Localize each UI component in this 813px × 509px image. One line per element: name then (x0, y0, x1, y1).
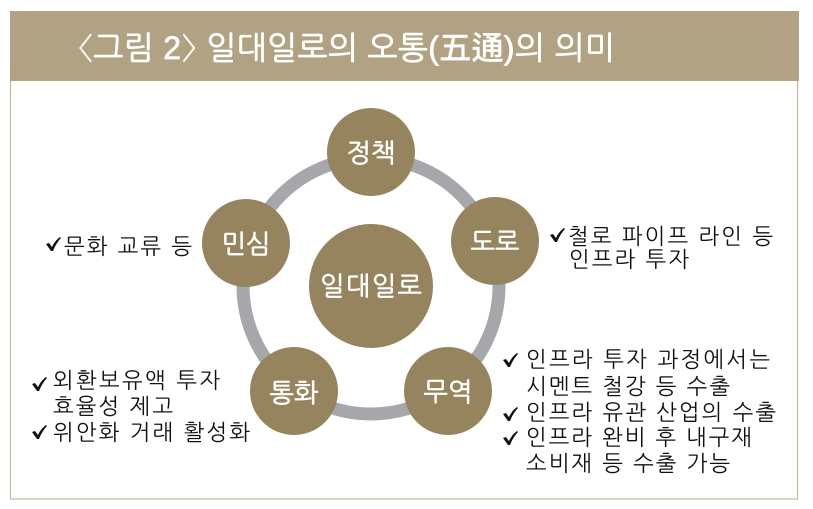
node: 통화: 통화 (270, 378, 318, 408)
text block: 무역: 인프라 유관 산업의 수출 (526, 400, 776, 425)
text block: 무역: 시멘트 철강 등 수출 (526, 374, 730, 399)
node: 정책 (327, 108, 415, 196)
center: 일대일로 (309, 224, 433, 348)
text block: 통화 (32, 368, 250, 445)
node: 민심: 민심 (222, 229, 270, 259)
text block: 민심: 문화 교류 등 (64, 234, 192, 259)
text block: 무역: 소비재 등 수출 가능 (526, 451, 730, 476)
center: 일대일로: 일대일로 (320, 271, 422, 301)
text block: 도로 (550, 224, 773, 272)
ring (243, 158, 499, 414)
node: 정책: 정책 (347, 138, 395, 168)
title: 〈그림 2〉 일대일로의 오통(五通)의 의미 (78, 30, 615, 66)
node: 무역 (404, 347, 492, 435)
text block: 무역: 인프라 투자 과정에서는 (526, 347, 770, 372)
text block: 통화: 외환보유액 투자 (53, 368, 220, 393)
diagram: ring of five connectivities (202, 108, 539, 435)
node: 도로 (451, 197, 539, 285)
node: 통화 (250, 347, 338, 435)
text block: 도로: 인프라 투자 (569, 247, 689, 272)
text block: 무역: 인프라 완비 후 내구재 (526, 425, 752, 450)
text block: 통화: 효율성 제고 (53, 394, 173, 419)
node: 무역: 무역 (424, 377, 472, 407)
node: 민심 (202, 199, 290, 287)
title bar (10, 11, 799, 81)
text block: 도로: 철로 파이프 라인 등 (568, 224, 773, 249)
node: 도로: 도로 (471, 227, 519, 257)
text block: 무역 (503, 347, 776, 476)
text block: 통화: 위안화 거래 활성화 (53, 420, 250, 445)
